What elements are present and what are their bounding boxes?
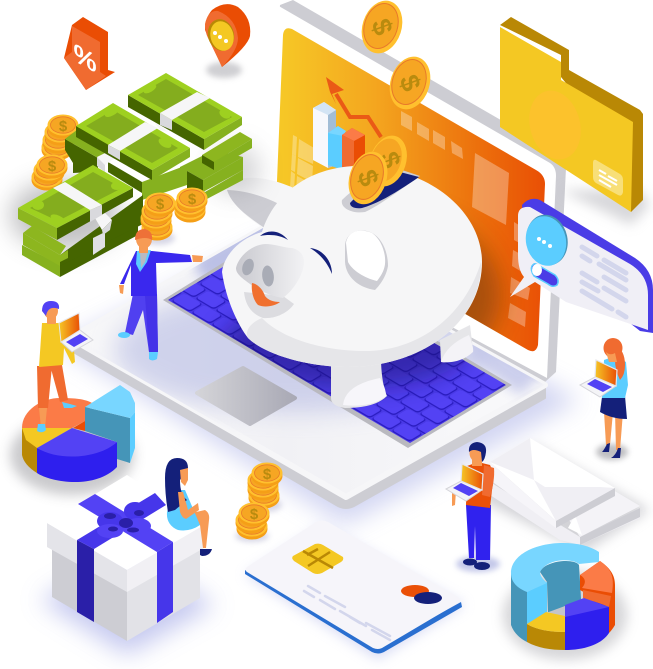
gift box — [40, 475, 215, 655]
yellow man legs — [37, 365, 68, 428]
gift ribbons — [77, 493, 173, 623]
arrow front — [64, 26, 106, 90]
card logo circles — [401, 585, 442, 604]
screen tiles — [290, 111, 530, 327]
suit head — [135, 229, 152, 253]
falling coin middle — [383, 51, 437, 115]
back top bundle — [128, 73, 242, 150]
piggy bank — [222, 166, 482, 367]
woman shoe — [200, 549, 212, 556]
donut blue top ring — [511, 543, 599, 592]
man head — [469, 442, 486, 466]
man shoes — [463, 558, 490, 570]
card text lines — [304, 586, 390, 640]
pig snout — [236, 244, 304, 318]
falling coin top: $ — [365, 15, 399, 39]
middle top bundle — [76, 103, 190, 180]
seated woman — [165, 458, 212, 556]
pie orange slice — [22, 398, 92, 440]
coin entering slot: $ — [351, 166, 385, 190]
donut gray floor — [546, 606, 582, 617]
gift bow — [97, 502, 151, 538]
card face — [246, 520, 460, 649]
folder — [500, 17, 650, 225]
woman shadow — [596, 444, 628, 460]
yellow man feet — [37, 402, 77, 432]
donut orange slice — [580, 561, 615, 633]
donut purple slice — [565, 598, 609, 650]
laptop base — [70, 228, 545, 508]
woman laptop — [580, 360, 617, 397]
yellow man head — [42, 301, 59, 324]
suit shoes — [118, 332, 158, 360]
man in suit — [118, 229, 203, 360]
bar chart on screen — [313, 102, 365, 170]
woman arm — [178, 492, 199, 519]
coin stack left — [32, 154, 68, 190]
box sides — [52, 548, 127, 641]
money stacks — [10, 73, 260, 277]
pie purple slice — [37, 428, 117, 482]
base shading around pig — [108, 228, 540, 421]
front stack lower layers — [22, 195, 143, 277]
bubble toggle — [531, 264, 558, 286]
pig shadow and legs — [331, 325, 473, 408]
middle stack lower layers — [65, 120, 187, 200]
suit legs — [125, 294, 158, 352]
bubble rim — [522, 199, 653, 333]
lower envelope — [490, 482, 640, 545]
woman skirt — [600, 396, 627, 419]
pig front leg — [331, 362, 387, 408]
coin stack F: $ — [250, 506, 259, 523]
bubble circle — [521, 211, 572, 270]
suit collar — [136, 250, 151, 272]
folder blob — [522, 85, 588, 165]
bubble text lines — [582, 247, 626, 317]
woman legs — [604, 412, 623, 450]
money shadow — [10, 180, 120, 250]
lid top — [47, 475, 204, 570]
card chip — [292, 544, 343, 574]
coin behind slot — [363, 131, 413, 191]
woman heels — [602, 443, 621, 458]
credit card — [245, 520, 465, 660]
pie chart left — [10, 385, 135, 495]
donut yellow slice — [527, 612, 565, 650]
chat bubble — [510, 199, 653, 333]
falling coin middle: $ — [393, 71, 427, 95]
pie raised blue slice — [85, 385, 135, 463]
man laptop — [446, 464, 483, 501]
coin stack behind money — [42, 114, 78, 160]
folder back rim — [500, 17, 643, 212]
coin entering slot — [342, 147, 394, 209]
man pants — [466, 505, 491, 560]
folder front — [500, 27, 633, 212]
pig shadow on screen — [465, 220, 514, 334]
donut chart — [503, 543, 627, 660]
pie shadow — [10, 415, 134, 495]
percent sign: % — [73, 37, 97, 79]
falling coin top — [355, 0, 409, 59]
man arm — [452, 491, 456, 506]
woman hair and head — [604, 338, 625, 380]
pig eyes — [260, 231, 332, 274]
pie yellow slice — [22, 428, 72, 473]
coin stack E: $ — [263, 466, 272, 483]
folder shadow — [560, 190, 650, 225]
man with laptop — [446, 442, 500, 572]
woman hair — [165, 458, 188, 512]
bubble face — [510, 207, 648, 330]
percent arrow — [64, 17, 115, 90]
coin stack left: $ — [48, 158, 57, 175]
coin stack C — [140, 192, 176, 245]
folder label — [593, 160, 623, 196]
pig belly shade — [247, 262, 481, 367]
coin stack behind money: $ — [59, 118, 68, 135]
pig right ear — [345, 231, 388, 290]
location pin — [204, 4, 250, 78]
yellow man torso — [39, 323, 75, 367]
suit hands — [119, 255, 203, 294]
touchpad — [197, 368, 295, 424]
suit jacket — [120, 251, 192, 296]
woman dress — [167, 490, 200, 530]
pig mouth — [252, 283, 280, 306]
man with yellow shirt — [37, 301, 93, 432]
front top bundle — [18, 165, 133, 240]
woman face — [180, 468, 188, 486]
envelopes — [480, 438, 650, 552]
donut blue outer side — [511, 573, 527, 642]
donut hole wall — [540, 561, 582, 615]
coin stack E — [248, 462, 282, 512]
coin stack D — [174, 188, 208, 222]
woman top — [602, 356, 628, 398]
coin stack F — [235, 502, 270, 542]
upper envelope — [490, 438, 615, 528]
coin stack D: $ — [188, 191, 197, 208]
laptop screen panel — [276, 28, 545, 352]
coin behind slot: $ — [373, 148, 407, 172]
keyboard shadow — [220, 300, 470, 390]
trend arrow on screen — [326, 77, 381, 137]
laptop floor shadow — [60, 240, 580, 525]
woman leg — [183, 510, 209, 548]
yellow man laptop — [59, 313, 93, 352]
pig left ear — [226, 178, 304, 230]
keyboard — [163, 262, 512, 448]
laptop — [70, 0, 566, 508]
envelope shadow — [480, 445, 650, 552]
donut inner bright wall — [527, 582, 547, 624]
back right stack — [180, 132, 252, 200]
coin slot — [342, 170, 420, 212]
coin stack C: $ — [156, 196, 165, 213]
pig right leg — [440, 325, 473, 362]
card edge — [245, 570, 462, 654]
donut shadow — [503, 570, 627, 660]
laptop screen frame — [262, 0, 566, 382]
man vest — [466, 462, 493, 508]
man shadow — [456, 556, 500, 572]
gift shadow — [40, 550, 215, 655]
arrow back — [64, 17, 115, 90]
pig body — [222, 166, 482, 367]
lid sides — [47, 523, 127, 592]
woman with laptop — [580, 338, 628, 460]
card shadow — [245, 525, 465, 660]
